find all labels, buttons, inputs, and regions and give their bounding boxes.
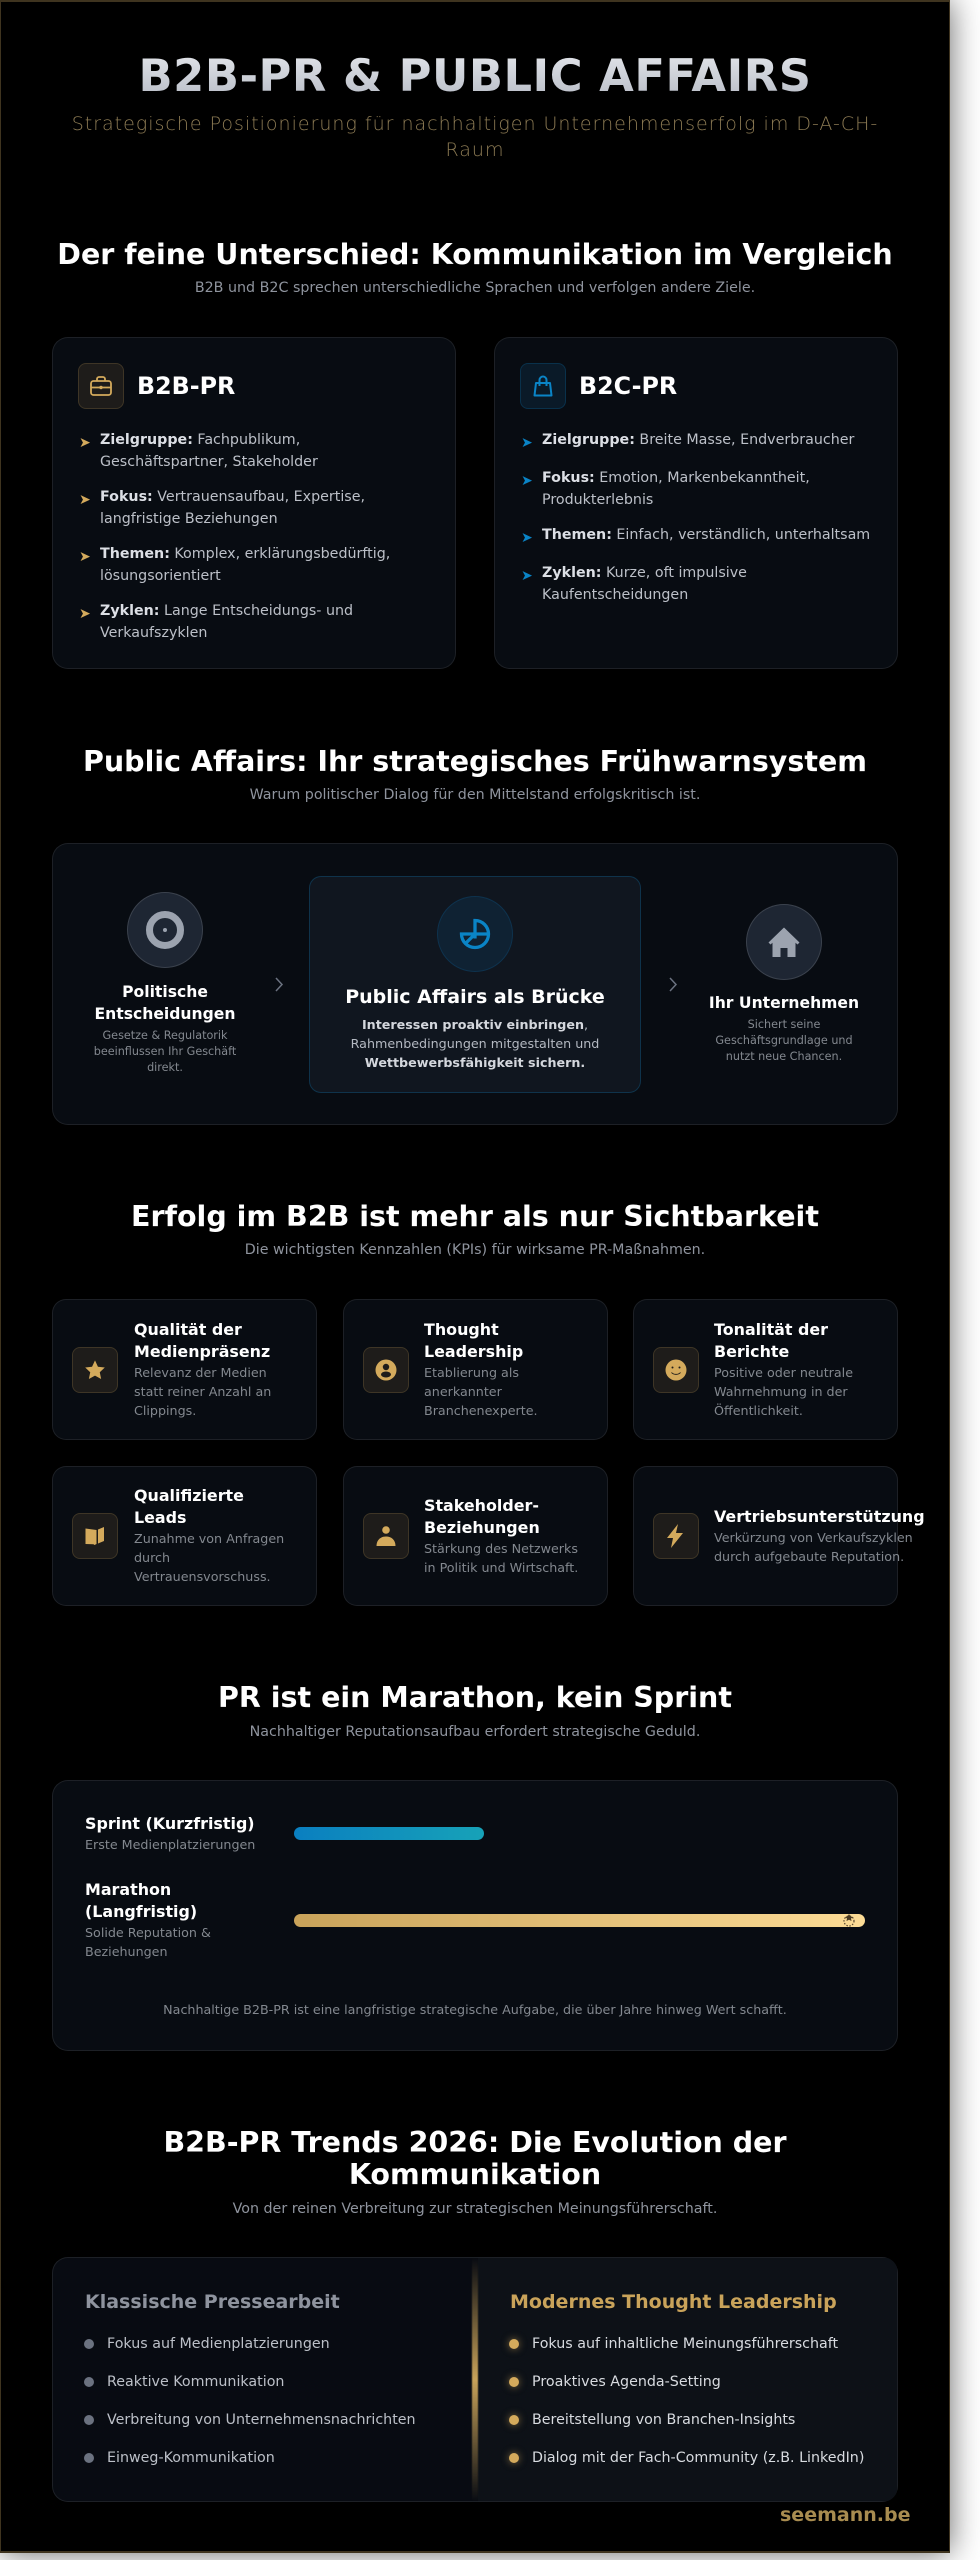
subheading: B2B und B2C sprechen unterschiedliche Sprachen und verfolgen andere Ziele. bbox=[195, 280, 755, 296]
node description: Gesetze & Regulatorik bbox=[103, 1029, 227, 1042]
bullet list: classic bbox=[84, 2336, 416, 2466]
list: B2B features: Verkaufszyklen bbox=[100, 625, 207, 641]
bullet list: classic: Verbreitung von Unternehmensnachrichten bbox=[107, 2412, 416, 2428]
KPI text: anerkannter bbox=[424, 1384, 502, 1399]
list: B2B features: ➤ bbox=[79, 549, 91, 565]
subtitle: Strategische Positionierung für nachhaltigen Unternehmenserfolg im D-A-CH- bbox=[72, 113, 878, 135]
list: B2C features: Produkterlebnis bbox=[542, 492, 653, 508]
list: B2B features: Zyklen: Lange Entscheidungs- und bbox=[100, 603, 353, 619]
bullet list: classic: Reaktive Kommunikation bbox=[107, 2374, 284, 2390]
icon: map bbox=[72, 1513, 118, 1559]
node title: Entscheidungen bbox=[95, 1005, 235, 1023]
list: B2C features: Fokus: Emotion, Markenbekanntheit, bbox=[542, 470, 810, 486]
node description: Geschäftsgrundlage und bbox=[715, 1034, 853, 1047]
title: B2B-PR & PUBLIC AFFAIRS bbox=[138, 49, 812, 102]
label: sprint: Erste Medienplatzierungen bbox=[85, 1837, 255, 1852]
subheading: Warum politischer Dialog für den Mittelstand erfolgskritisch ist. bbox=[250, 787, 700, 803]
KPI text: Clippings. bbox=[134, 1403, 196, 1418]
KPI text bbox=[424, 1320, 538, 1418]
node: your company bbox=[709, 904, 859, 1063]
KPI text: Beziehungen bbox=[424, 1518, 540, 1537]
bar: marathon bbox=[294, 1914, 865, 1927]
heading: Public Affairs: Ihr strategisches Frühwarnsystem bbox=[83, 745, 867, 778]
icon: finish marker bbox=[843, 1914, 855, 1927]
list: B2C features: ➤ bbox=[521, 568, 533, 584]
heading: Erfolg im B2B ist mehr als nur Sichtbarkeit bbox=[131, 1200, 819, 1233]
section: trends bbox=[52, 2126, 898, 2502]
list: B2C features bbox=[521, 432, 870, 603]
KPI text: durch bbox=[134, 1550, 170, 1565]
label: marathon: Beziehungen bbox=[85, 1944, 168, 1959]
node description: Sichert seine bbox=[748, 1018, 820, 1031]
list: B2B features: Zielgruppe: Fachpublikum, bbox=[100, 432, 300, 448]
KPI text: Berichte bbox=[714, 1342, 789, 1361]
list: B2B features: Geschäftspartner, Stakeholder bbox=[100, 454, 318, 470]
bullet list: classic: Einweg-Kommunikation bbox=[107, 2450, 275, 2466]
KPI card: media quality bbox=[52, 1299, 317, 1440]
icon: target bbox=[127, 892, 203, 968]
list: B2B features: Themen: Komplex, erklärungsbedürftig, bbox=[100, 546, 390, 562]
KPI text bbox=[424, 1496, 578, 1575]
box title: Public Affairs als Brücke bbox=[345, 986, 605, 1008]
divider bbox=[472, 2257, 478, 2502]
list: B2C features: Zielgruppe: Breite Masse, Endverbraucher bbox=[542, 432, 854, 448]
KPI card: qualified leads bbox=[52, 1466, 317, 1606]
KPI text bbox=[134, 1486, 284, 1584]
list: B2C features: ➤ bbox=[521, 473, 533, 489]
label: marathon: Solide Reputation & bbox=[85, 1925, 211, 1940]
KPI text: Leads bbox=[134, 1508, 186, 1527]
KPI text: Tonalität der bbox=[714, 1320, 828, 1339]
KPI text: in Politik und Wirtschaft. bbox=[424, 1560, 578, 1575]
KPI card: thought leadership bbox=[343, 1299, 608, 1440]
KPI card: stakeholder relations bbox=[343, 1466, 608, 1606]
KPI text: Medienpräsenz bbox=[134, 1342, 270, 1361]
KPI text: Positive oder neutrale bbox=[714, 1365, 853, 1380]
label: sprint: Sprint (Kurzfristig) bbox=[85, 1814, 255, 1833]
heading: Der feine Unterschied: Kommunikation im Vergleich bbox=[57, 238, 893, 271]
bullet list: classic: Fokus auf Medienplatzierungen bbox=[107, 2336, 330, 2352]
list: B2C features: Kaufentscheidungen bbox=[542, 587, 688, 603]
heading: B2B-PR Trends 2026: Die Evolution der bbox=[163, 2126, 787, 2159]
icon: user circle bbox=[363, 1347, 409, 1393]
subtitle bbox=[72, 113, 878, 160]
KPI text: statt reiner Anzahl an bbox=[134, 1384, 271, 1399]
KPI text: Wahrnehmung in der bbox=[714, 1384, 848, 1399]
node description: nutzt neue Chancen. bbox=[726, 1050, 842, 1063]
list: B2C features: ➤ bbox=[521, 530, 533, 546]
column heading: modern: Modernes Thought Leadership bbox=[510, 2291, 837, 2313]
list: B2C features: Themen: Einfach, verständlich, unterhaltsam bbox=[542, 527, 870, 543]
label: sprint bbox=[85, 1814, 255, 1852]
KPI text: Leadership bbox=[424, 1342, 523, 1361]
right background bbox=[478, 2258, 897, 2501]
bullet list: modern: Bereitstellung von Branchen-Insights bbox=[532, 2412, 795, 2428]
header bbox=[72, 49, 878, 160]
node description bbox=[94, 1029, 236, 1074]
KPI text: Zunahme von Anfragen bbox=[134, 1531, 284, 1546]
icon: bolt bbox=[653, 1513, 699, 1559]
caption: Nachhaltige B2B-PR ist eine langfristige strategische Aufgabe, die über Jahre hinweg Wert schafft. bbox=[163, 2002, 787, 2017]
column heading: classic: Klassische Pressearbeit bbox=[85, 2291, 340, 2313]
panel: timeline bbox=[52, 1780, 898, 2051]
title bbox=[0, 41, 950, 111]
KPI text: Thought bbox=[424, 1320, 499, 1339]
node title: Politische bbox=[122, 983, 208, 1001]
KPI text bbox=[714, 1507, 925, 1564]
icon: person bbox=[363, 1513, 409, 1559]
section: comparison bbox=[52, 238, 898, 669]
heading: PR ist ein Marathon, kein Sprint bbox=[218, 1681, 732, 1714]
list: B2B features: ➤ bbox=[79, 606, 91, 622]
heading bbox=[163, 2126, 787, 2191]
list: B2B features: Fokus: Vertrauensaufbau, Expertise, bbox=[100, 489, 365, 505]
KPI text bbox=[134, 1320, 271, 1418]
section: public affairs bbox=[52, 745, 898, 1125]
node: political decisions bbox=[94, 892, 236, 1074]
panel: B2B-PR bbox=[52, 337, 456, 669]
node title: Ihr Unternehmen bbox=[709, 994, 859, 1012]
node title bbox=[95, 983, 235, 1023]
footer brand: seemann.be bbox=[780, 2504, 910, 2526]
bullet list: modern: Dialog mit der Fach-Community (z.B. LinkedIn) bbox=[532, 2450, 864, 2466]
KPI text: Stakeholder- bbox=[424, 1496, 539, 1515]
card title: B2C-PR bbox=[579, 372, 677, 400]
KPI text: Vertriebsunterstützung bbox=[714, 1507, 925, 1526]
subheading: Von der reinen Verbreitung zur strategischen Meinungsführerschaft. bbox=[233, 2201, 717, 2217]
heading: Kommunikation bbox=[349, 2158, 601, 2191]
center box: public affairs bridge bbox=[309, 876, 641, 1093]
KPI text: Vertrauensvorschuss. bbox=[134, 1569, 271, 1584]
section: KPIs bbox=[52, 1200, 925, 1606]
subheading: Nachhaltiger Reputationsaufbau erfordert strategische Geduld. bbox=[250, 1724, 700, 1740]
KPI card: sales support bbox=[633, 1466, 898, 1606]
KPI text: Relevanz der Medien bbox=[134, 1365, 267, 1380]
panel: B2C-PR bbox=[494, 337, 898, 669]
bullet list: modern: Fokus auf inhaltliche Meinungsführerschaft bbox=[532, 2336, 838, 2352]
KPI text: Verkürzung von Verkaufszyklen bbox=[714, 1530, 913, 1545]
panel: flow diagram bbox=[52, 843, 898, 1125]
card title: B2B-PR bbox=[137, 372, 235, 400]
KPI text: Stärkung des Netzwerks bbox=[424, 1541, 578, 1556]
arrow bbox=[670, 978, 677, 992]
node description: direkt. bbox=[147, 1061, 183, 1074]
icon: bridge bbox=[437, 896, 513, 972]
KPI text bbox=[714, 1320, 853, 1418]
label: marathon bbox=[85, 1880, 211, 1959]
label: marathon: (Langfristig) bbox=[85, 1902, 197, 1921]
subtitle: Raum bbox=[446, 138, 504, 160]
KPI text: Etablierung als bbox=[424, 1365, 519, 1380]
bullet list: modern: Proaktives Agenda-Setting bbox=[532, 2374, 721, 2390]
KPI text: durch aufgebaute Reputation. bbox=[714, 1549, 904, 1564]
box text bbox=[351, 1017, 599, 1070]
icon: star bbox=[72, 1347, 118, 1393]
subheading: Die wichtigsten Kennzahlen (KPIs) für wirksame PR-Maßnahmen. bbox=[245, 1242, 705, 1258]
list: B2B features: langfristige Beziehungen bbox=[100, 511, 278, 527]
KPI card: tonality bbox=[633, 1299, 898, 1440]
node description: beeinflussen Ihr Geschäft bbox=[94, 1045, 236, 1058]
box text: Interessen proaktiv einbringen, bbox=[362, 1017, 588, 1032]
section: marathon bbox=[52, 1681, 898, 2051]
label: marathon: Marathon bbox=[85, 1880, 171, 1899]
list: B2B features: ➤ bbox=[79, 435, 91, 451]
bar: sprint bbox=[294, 1827, 484, 1840]
bullet list: modern bbox=[504, 2335, 864, 2467]
panel: comparison bbox=[52, 2257, 898, 2502]
icon: shopping bag bbox=[520, 363, 566, 409]
list: B2C features: ➤ bbox=[521, 435, 533, 451]
node description bbox=[715, 1018, 853, 1063]
KPI text: Qualifizierte bbox=[134, 1486, 244, 1505]
icon: house bbox=[746, 904, 822, 980]
KPI text: Branchenexperte. bbox=[424, 1403, 538, 1418]
box text: Rahmenbedingungen mitgestalten und bbox=[351, 1036, 599, 1051]
list: B2B features: ➤ bbox=[79, 492, 91, 508]
list: B2B features: lösungsorientiert bbox=[100, 568, 221, 584]
KPI text: Öffentlichkeit. bbox=[714, 1403, 803, 1418]
list: B2C features: Zyklen: Kurze, oft impulsive bbox=[542, 565, 747, 581]
arrow bbox=[276, 978, 283, 992]
box text: Wettbewerbsfähigkeit sichern. bbox=[365, 1055, 585, 1070]
icon: briefcase bbox=[78, 363, 124, 409]
list: B2B features bbox=[79, 432, 390, 641]
icon: smile bbox=[653, 1347, 699, 1393]
KPI text: Qualität der bbox=[134, 1320, 242, 1339]
